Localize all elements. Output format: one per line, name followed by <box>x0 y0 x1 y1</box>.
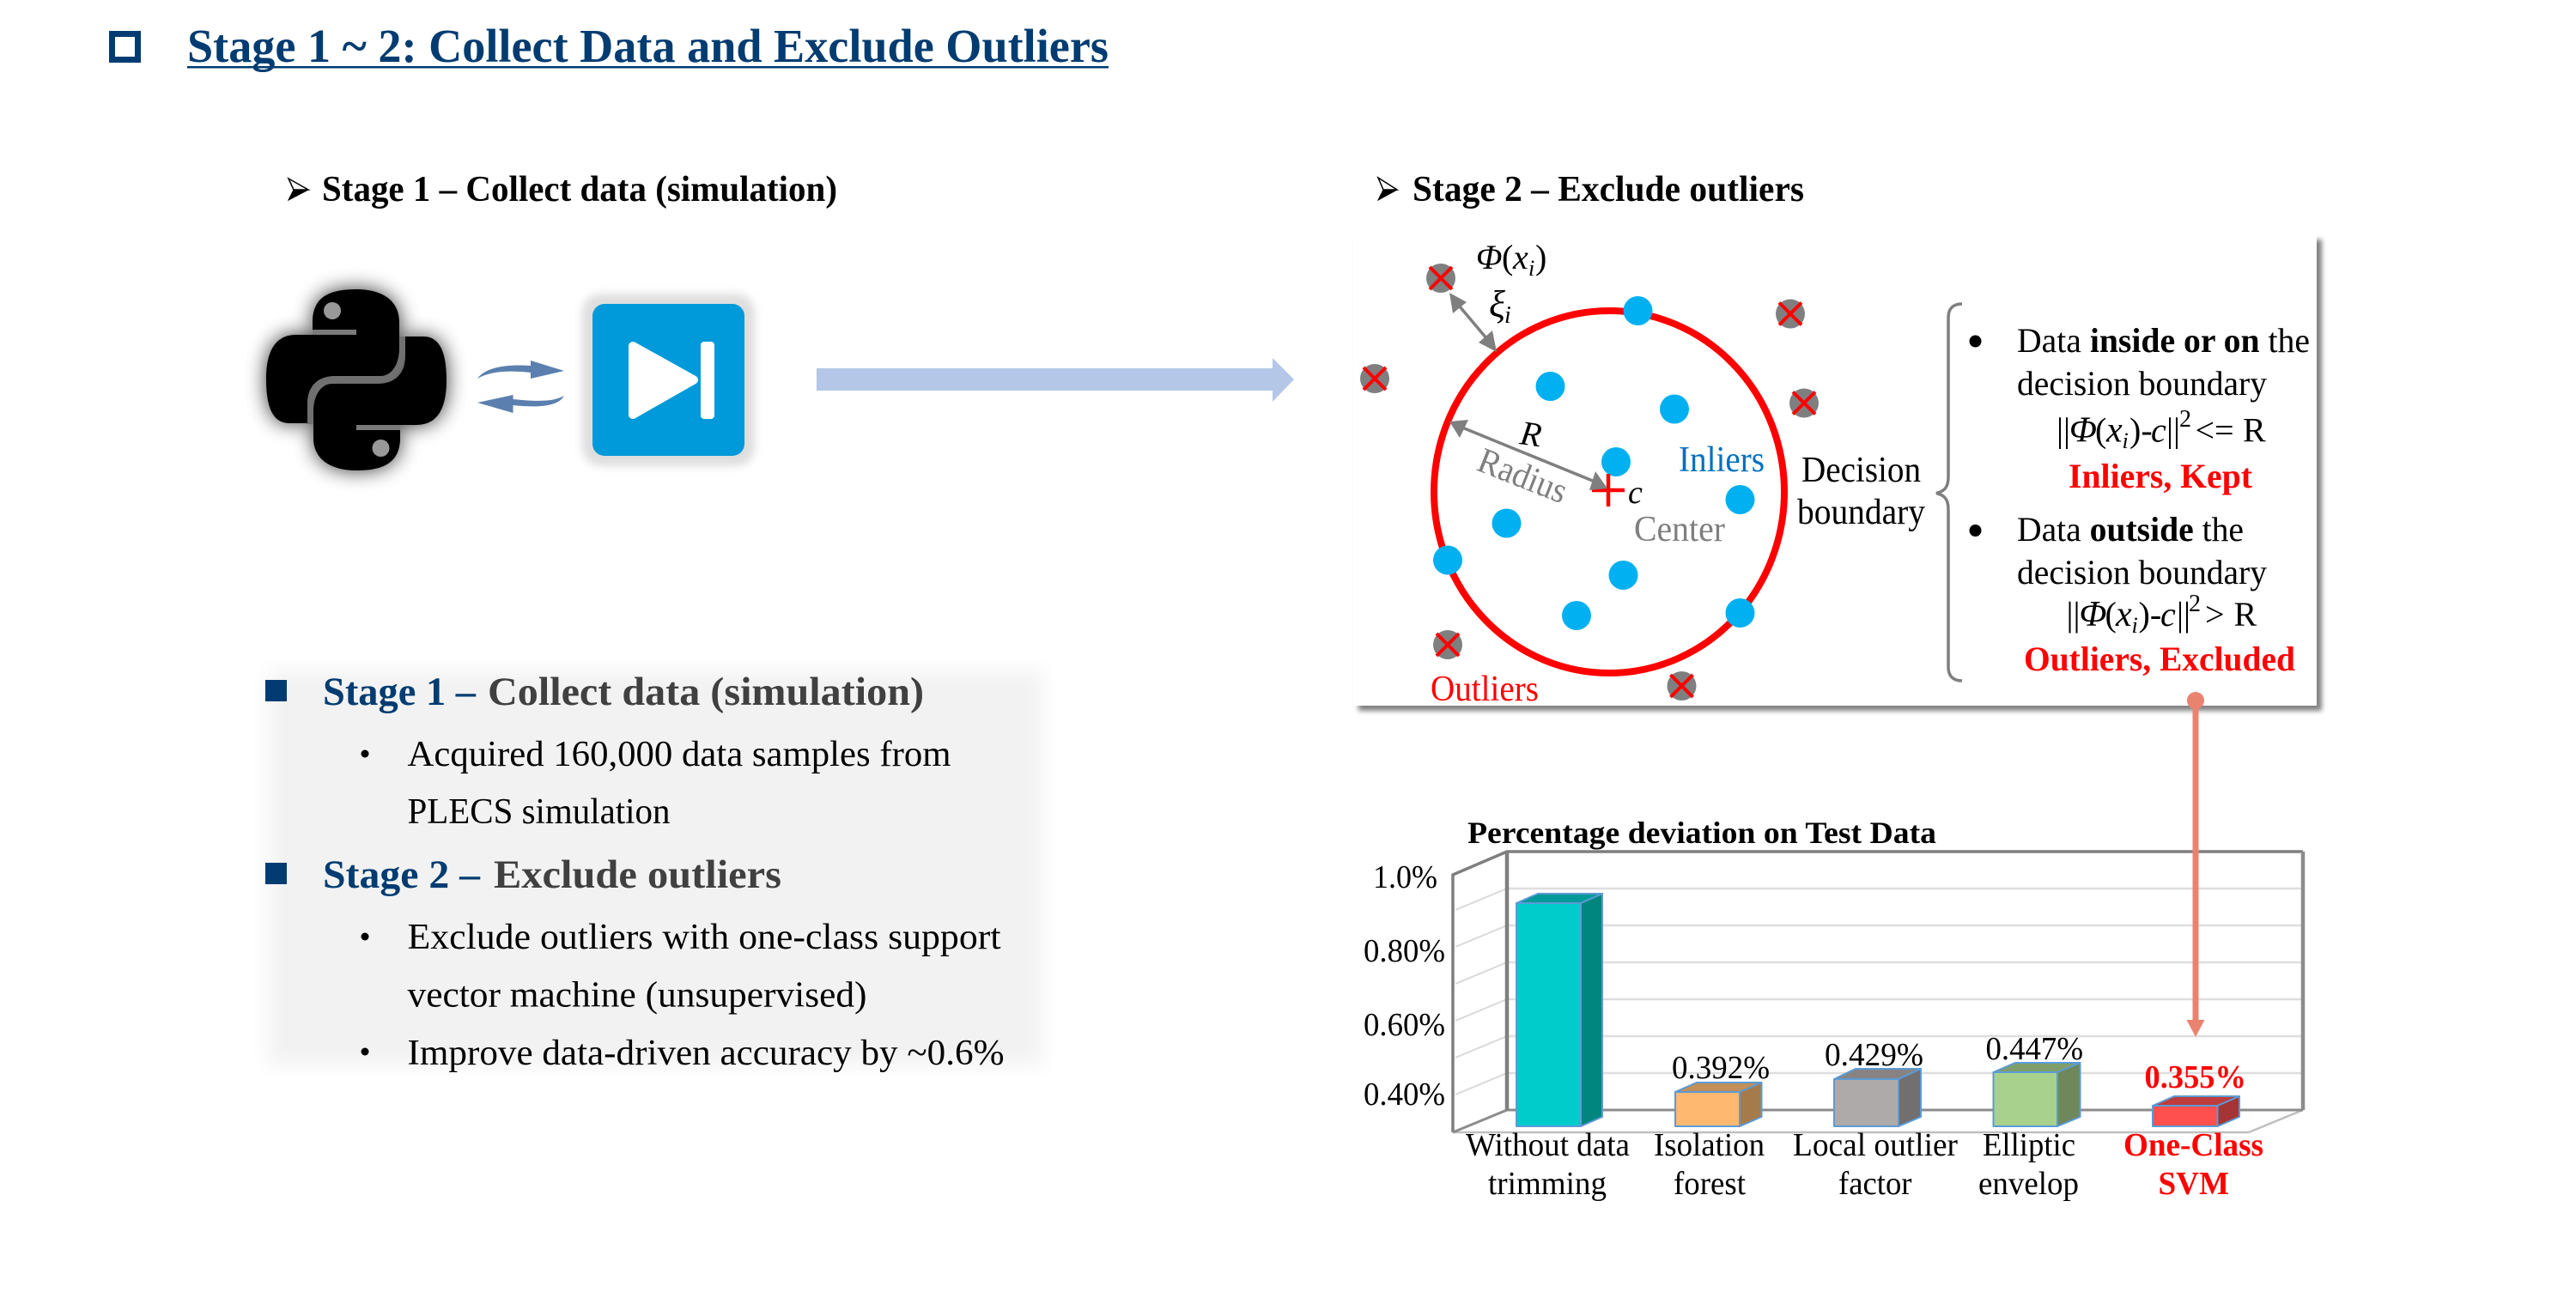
icon: PLECS logo <box>582 294 755 466</box>
heading: stage 1: Stage 1 – Collect data (simulation) <box>322 170 837 209</box>
text block: inliers rule: R <box>2243 410 2266 450</box>
value labels <box>1672 1031 2246 1095</box>
stage 1 summary heading: Collect data (simulation) <box>488 670 924 714</box>
stage 2 bullet: one-class svm: vector machine (unsupervised) <box>407 975 867 1015</box>
panel background <box>268 671 1042 1064</box>
text block: outliers rule: || <box>2177 595 2190 634</box>
value labels: 0.429% <box>1825 1037 1923 1073</box>
brace <box>1936 304 1962 681</box>
chart title: Percentage deviation on Test Data <box>1467 816 1936 850</box>
text block: inliers rule: Inliers, Kept <box>2069 457 2253 495</box>
text block: outliers rule: Data outside the <box>2017 510 2244 549</box>
stage 2 bullet: accuracy: Improve data-driven accuracy by ~0.6% <box>407 1034 1005 1073</box>
value labels: 0.447% <box>1985 1031 2083 1067</box>
title <box>112 20 1109 72</box>
stage 1 bullet: Acquired 160,000 data samples from <box>407 735 951 774</box>
label: decision boundary <box>1797 451 1925 532</box>
category labels: envelop <box>1978 1166 2079 1202</box>
stage 2 summary heading <box>265 852 781 897</box>
label: feature map: x <box>1512 238 1528 276</box>
category labels: SVM <box>2159 1166 2229 1202</box>
icon: title square bullet <box>112 34 137 60</box>
arrow: slack distance <box>1449 293 1497 352</box>
stage 1 bullet <box>361 735 951 832</box>
stage 2 bullet: one-class svm <box>361 918 1001 1015</box>
label: center: Center <box>1634 510 1725 549</box>
y axis labels: 0.80% <box>1364 933 1445 969</box>
text block: outliers rule: Outliers, Excluded <box>2024 640 2295 678</box>
category labels: Without data <box>1466 1127 1630 1163</box>
arrow: stage 1 to stage 2 <box>817 358 1294 402</box>
text block: outliers rule: R <box>2234 595 2257 634</box>
text block: inliers rule: decision boundary <box>2017 364 2267 403</box>
category labels: trimming <box>1488 1166 1607 1202</box>
stage 1 bullet: PLECS simulation <box>407 792 670 832</box>
text block: outliers rule: Φ <box>2080 595 2106 634</box>
text block: outliers rule: decision boundary <box>2017 553 2267 591</box>
text block: outliers rule: || <box>2066 595 2081 634</box>
chart frame and grid <box>1453 852 2303 1132</box>
y axis labels: 1.0% <box>1373 859 1437 895</box>
stage 1 summary heading <box>265 670 924 714</box>
text block: outliers rule: x <box>2115 595 2132 634</box>
label: feature map: ( <box>1502 238 1513 276</box>
title text: Stage 1 ~ 2: Collect Data and Exclude Outliers <box>187 20 1109 72</box>
label: slack: i <box>1504 302 1511 329</box>
value labels: 0.392% <box>1672 1050 1770 1086</box>
outlier points <box>1360 264 1819 701</box>
text block: inliers rule: Φ <box>2069 410 2097 450</box>
text block: outliers rule: i <box>2131 613 2138 638</box>
text block: inliers rule: )- <box>2129 410 2153 450</box>
category labels: One-Class <box>2123 1127 2263 1163</box>
text block: outliers rule: 2 <box>2189 591 2201 617</box>
category labels: factor <box>1838 1166 1912 1202</box>
text block: inliers rule: || <box>2057 410 2070 450</box>
text block: outliers rule <box>1970 510 2295 678</box>
label: radius: Radius <box>1472 441 1573 512</box>
panel shadow and card <box>1354 234 2322 711</box>
bar: one-class svm <box>2153 1096 2239 1126</box>
text block: inliers rule: i <box>2123 428 2129 453</box>
category labels: forest <box>1674 1166 1746 1202</box>
panel: one-class svm diagram <box>1354 234 2322 711</box>
center mark <box>1592 474 1625 506</box>
stage 2 summary heading: Stage 2 – <box>323 852 481 897</box>
text block: outliers rule: > <box>2205 595 2225 634</box>
value labels: 0.355% <box>2145 1059 2246 1095</box>
label: feature map: ) <box>1535 238 1546 276</box>
category labels <box>1466 1127 2263 1202</box>
heading: stage 2: Stage 2 – Exclude outliers <box>1413 170 1804 209</box>
text block: outliers rule: c <box>2160 595 2176 634</box>
icon: exchange arrows <box>477 361 564 413</box>
text block: inliers rule: || <box>2166 410 2180 450</box>
arrow: one-class svm selection <box>2186 692 2205 1037</box>
stage 2 bullet: one-class svm: Exclude outliers with one-class support <box>407 918 1001 957</box>
inlier points <box>1433 296 1755 630</box>
bar: local outlier factor <box>1834 1069 1921 1126</box>
label: R: R <box>1517 413 1544 454</box>
text block: outliers rule: )- <box>2138 595 2161 634</box>
text block: inliers rule <box>1970 321 2310 495</box>
text block: outliers rule: ( <box>2105 595 2117 634</box>
category labels: Local outlier <box>1793 1127 1958 1163</box>
stage 2 summary heading: Exclude outliers <box>494 852 781 897</box>
text block: inliers rule: x <box>2105 410 2123 450</box>
bar: elliptic envelop <box>1994 1063 2080 1126</box>
y axis labels: 0.60% <box>1364 1007 1445 1043</box>
bar: isolation forest <box>1675 1083 1762 1126</box>
stage 1 summary heading: Stage 1 – <box>323 670 476 714</box>
text block: inliers rule: ( <box>2095 410 2106 450</box>
arrow: radius <box>1449 420 1607 490</box>
label: feature map: Φ <box>1476 238 1502 276</box>
category labels: Elliptic <box>1983 1127 2075 1163</box>
bar: without data trimming <box>1516 894 1602 1126</box>
category labels: Isolation <box>1654 1127 1765 1163</box>
text block: inliers rule: Data inside or on the <box>2017 321 2310 360</box>
label: slack: ξ <box>1489 283 1505 325</box>
label: decision boundary: boundary <box>1797 493 1925 532</box>
text block: inliers rule: 2 <box>2179 406 2191 433</box>
y axis labels <box>1364 859 1445 1113</box>
text block: inliers rule: c <box>2151 410 2166 450</box>
panel: stage summary <box>265 670 1042 1073</box>
y axis labels: 0.40% <box>1364 1077 1445 1113</box>
text block: inliers rule: <= <box>2195 410 2234 450</box>
icon: python logo <box>266 289 447 470</box>
label: outliers: Outliers <box>1431 670 1539 709</box>
label: feature map: i <box>1528 256 1534 281</box>
label: inliers: Inliers <box>1679 440 1765 480</box>
label: c: c <box>1628 475 1643 511</box>
decision boundary circle <box>1434 311 1784 673</box>
label: decision boundary: Decision <box>1801 451 1921 490</box>
chart: percentage deviation on test data <box>1364 816 2303 1202</box>
